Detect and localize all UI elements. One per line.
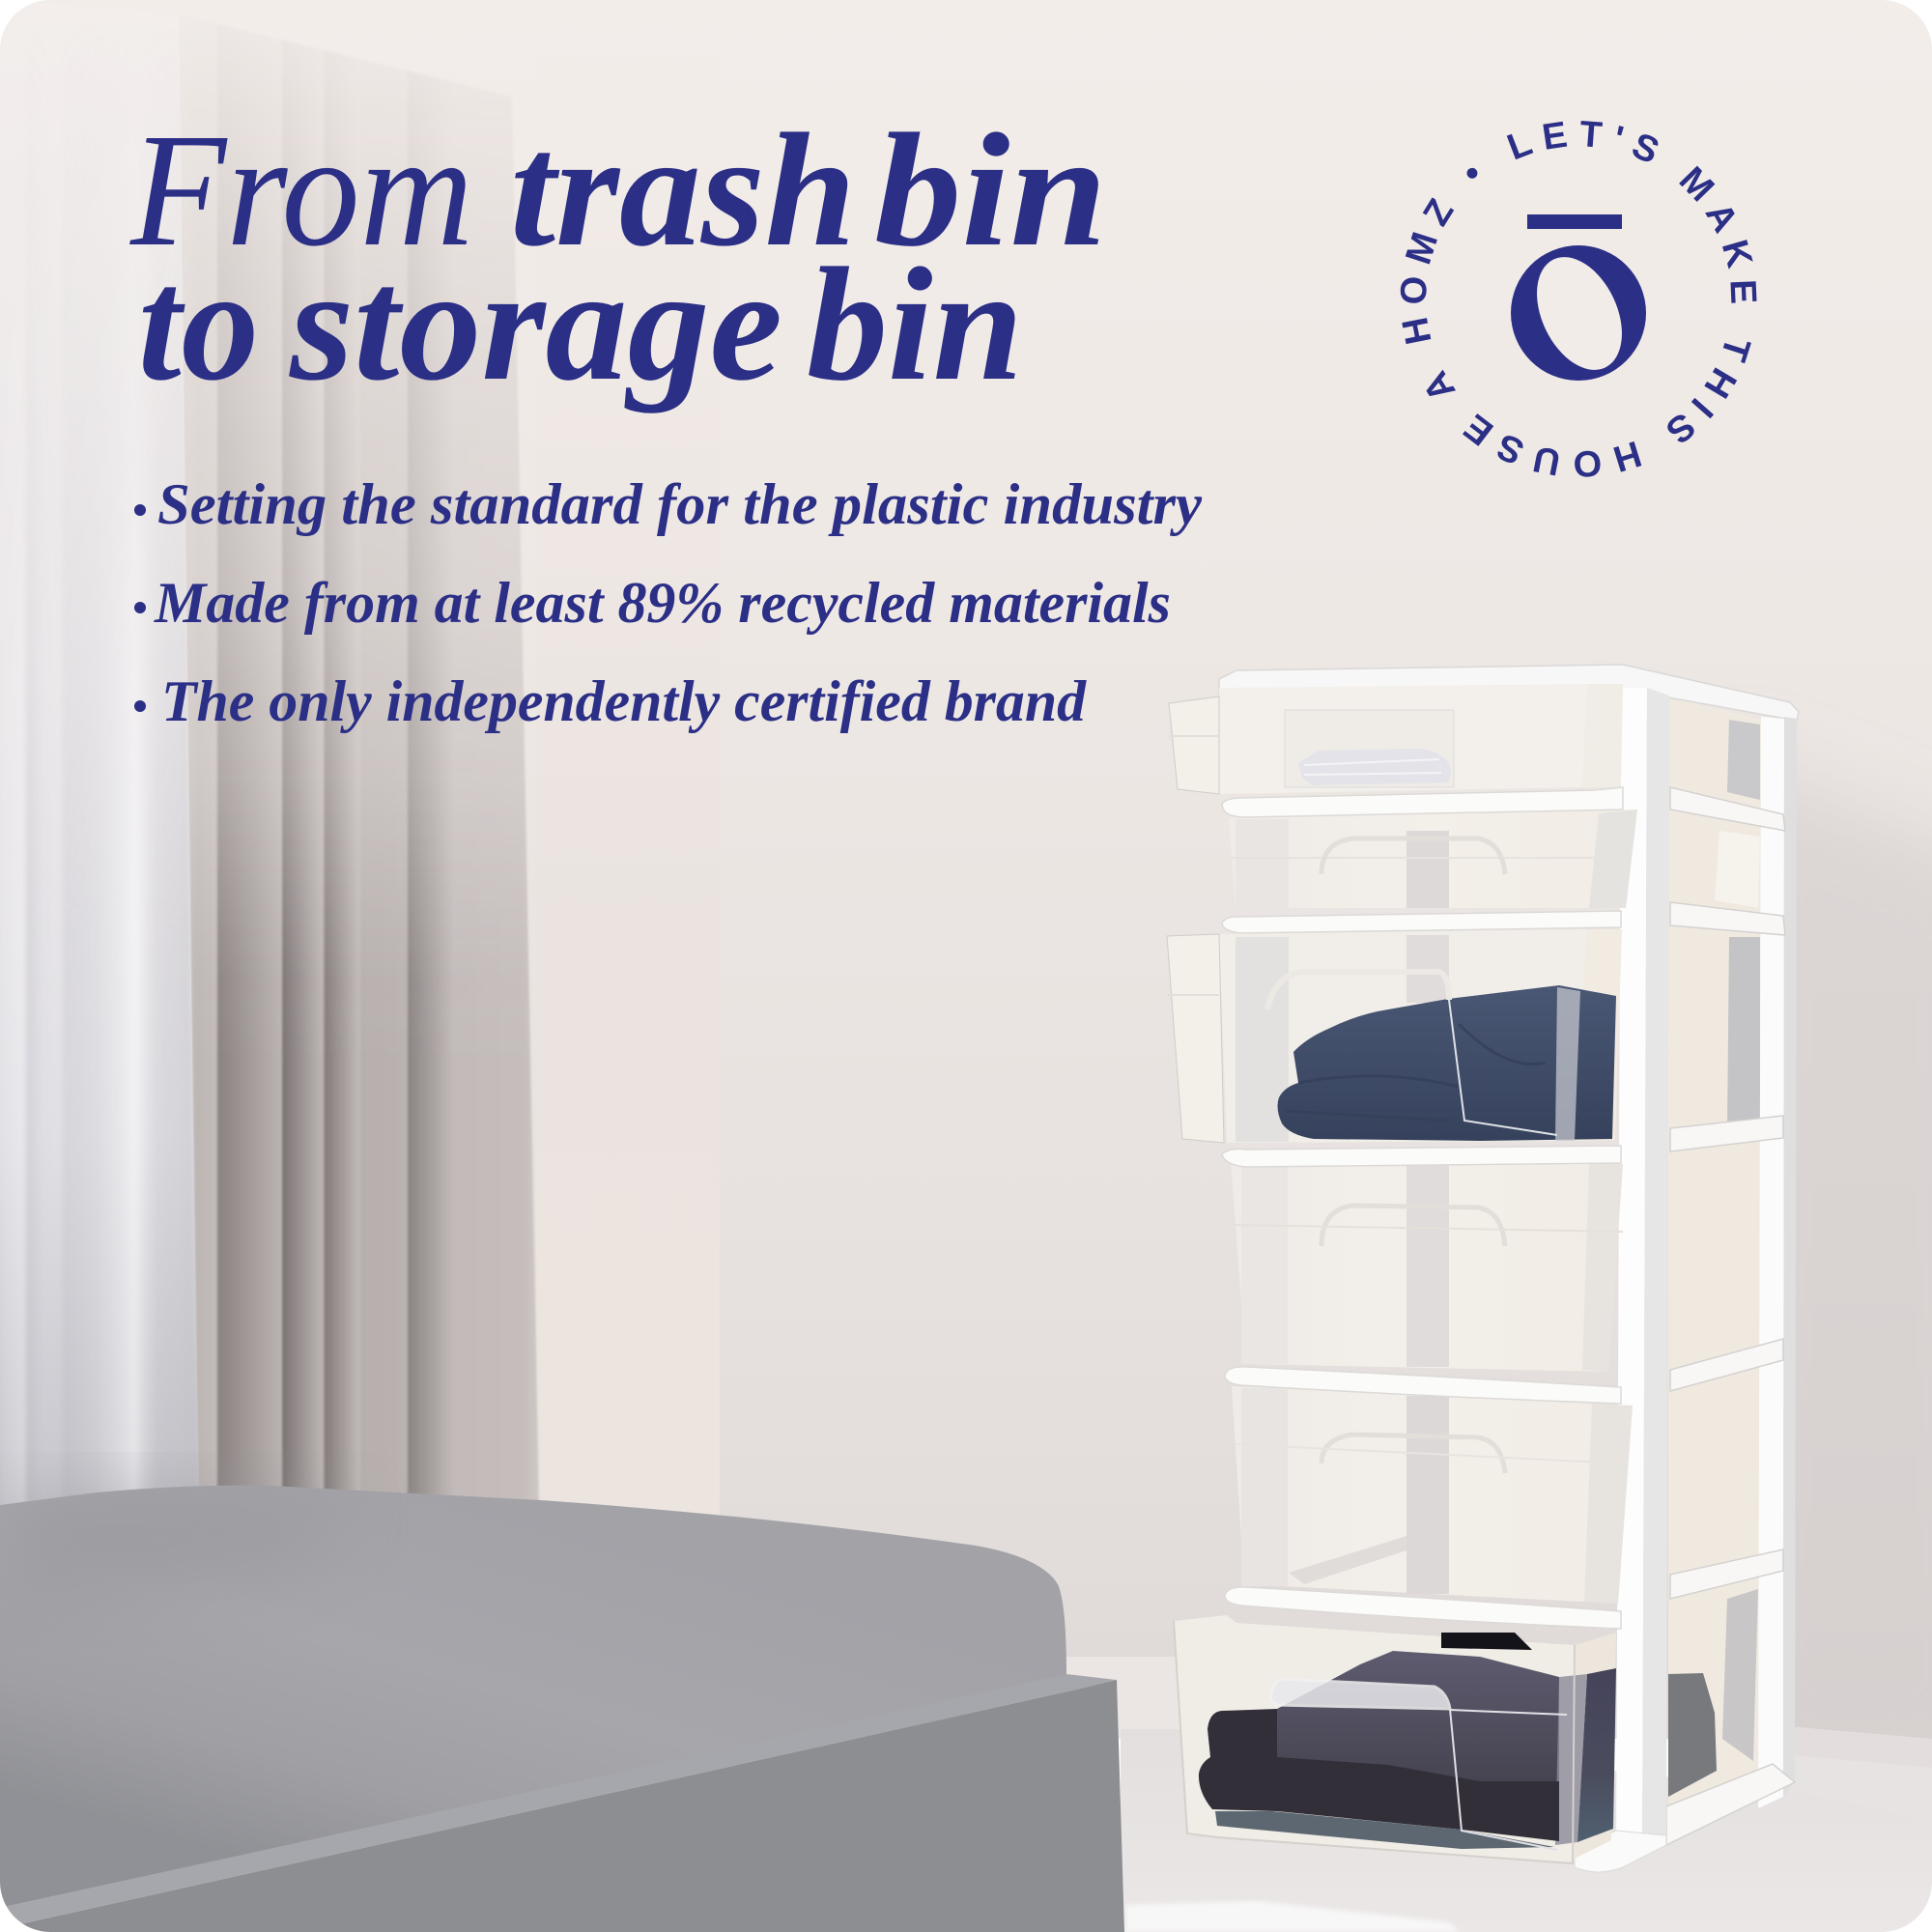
- dark curtain: [179, 14, 539, 1507]
- drawer 1 with folded cloth: [1169, 684, 1623, 794]
- logo: o with macron: [1511, 214, 1646, 384]
- brand badge: [1401, 121, 1756, 477]
- dark rolled clothes: [1199, 1709, 1559, 1841]
- sheer curtain: [0, 404, 197, 1505]
- folded white cloth: [1298, 749, 1451, 785]
- drawer 3 with folded jeans: [1167, 929, 1622, 1143]
- drawer 2: [1289, 810, 1637, 908]
- title: bin: [807, 235, 1023, 414]
- drawer 6 with folded clothes: [1174, 1615, 1616, 1863]
- title: trash: [510, 100, 856, 280]
- circular slogan: LET'S MAKE THIS HOUSE A HOMZ •: [1401, 121, 1756, 477]
- folded jeans: [1278, 985, 1616, 1141]
- front post: [1616, 688, 1669, 1864]
- rear post: [1758, 717, 1797, 1808]
- drawer 5: [1232, 1386, 1633, 1604]
- title: bin: [874, 100, 1107, 280]
- title: to: [138, 235, 259, 414]
- blue-gray layer: [1215, 1811, 1554, 1849]
- bullet 1: Setting the standard for the plastic industry: [157, 472, 1202, 536]
- bed: [0, 1486, 1124, 1932]
- side panels and gaps: [1668, 697, 1763, 1816]
- front rails: [1222, 787, 1623, 1629]
- bullet 3: The only independently certified brand: [161, 669, 1087, 733]
- bed frame piping: [0, 1674, 1117, 1925]
- top beam: [1219, 665, 1799, 721]
- bullet 2: Made from at least 89% recycled materials: [154, 571, 1171, 635]
- baseboard and floor: [1063, 1657, 1932, 1932]
- mattress: [0, 1486, 1066, 1908]
- clothes seen through side: [1668, 1673, 1717, 1797]
- clothes behind, right part: [1577, 1668, 1616, 1842]
- storage tower: [1167, 665, 1799, 1872]
- title: storage: [289, 235, 782, 414]
- title: [129, 100, 1107, 414]
- purple sweater: [1277, 1651, 1559, 1787]
- bullet list: [134, 472, 1202, 733]
- side rails: [1666, 787, 1795, 1845]
- bed frame front: [15, 1680, 1124, 1932]
- drawer 4: [1231, 1162, 1623, 1372]
- shadow under rail: [1441, 1633, 1532, 1650]
- title: From: [129, 100, 473, 280]
- clear handle: [1270, 1679, 1450, 1709]
- base corner: [1575, 1831, 1666, 1872]
